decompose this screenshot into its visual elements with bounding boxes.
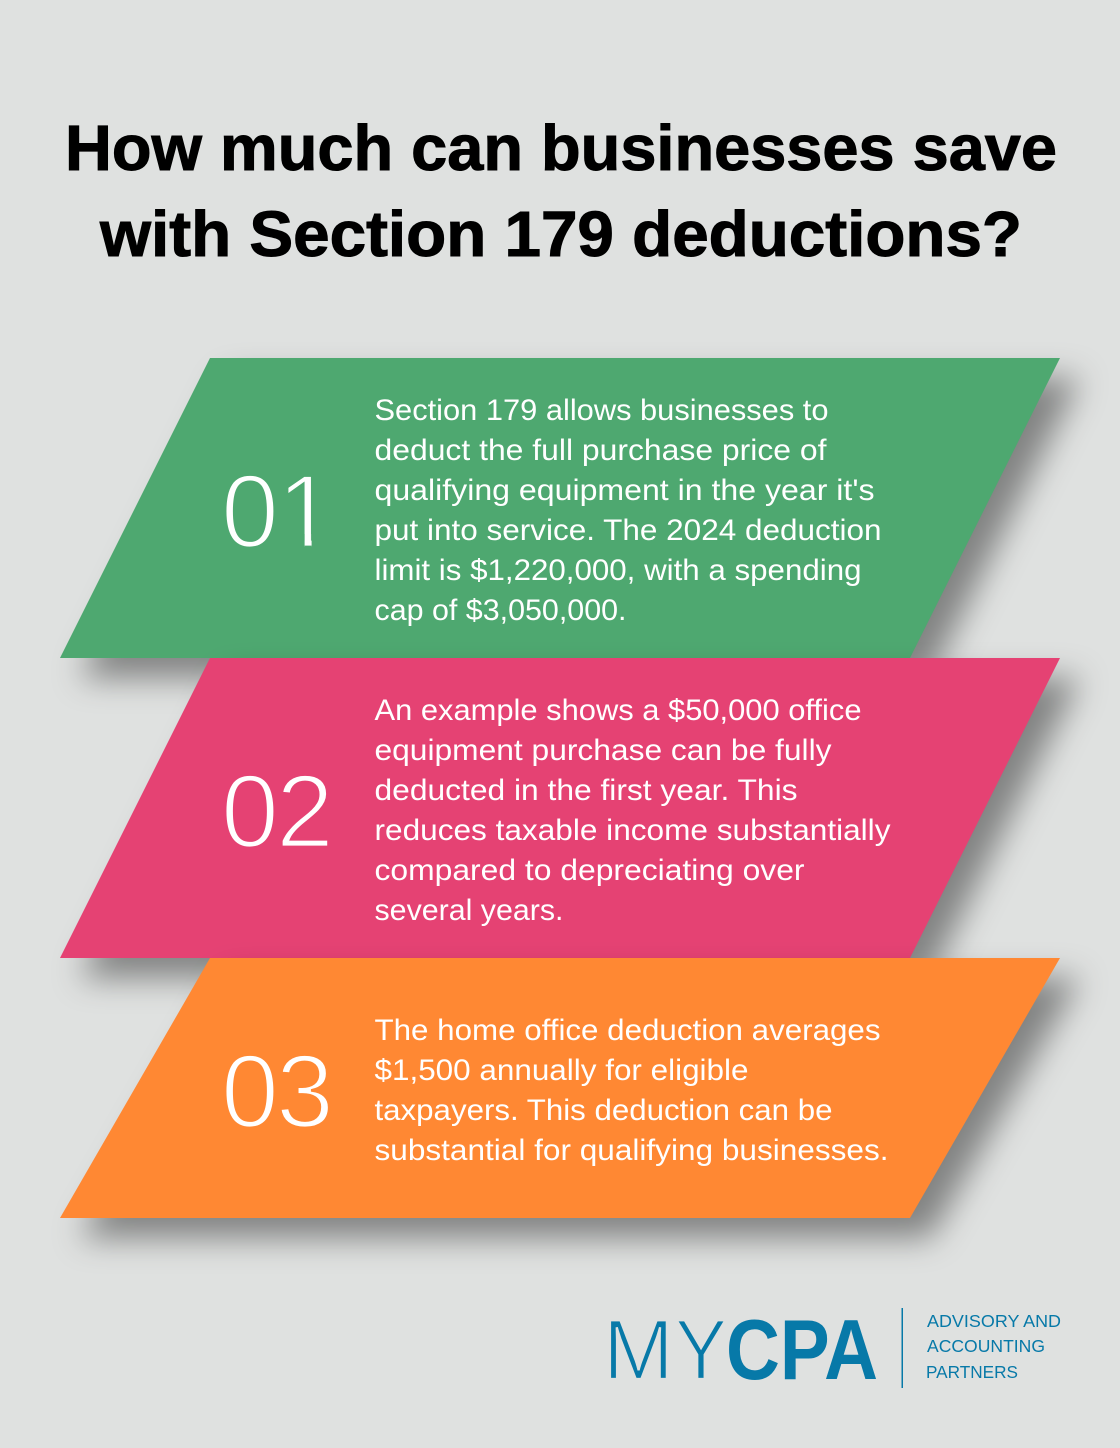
logo: MYCPA: ADVISORY AND [927,1311,1061,1331]
text: home office deduction: The home office deduction averages [374,1014,880,1047]
number 02: 2 [276,754,334,870]
text: home office deduction [374,1014,888,1167]
text: section 179 limit: deduct the full purchase price of [374,434,827,467]
logo: MYCPA: Y [675,1303,727,1398]
text: office equipment example: equipment purchase can be fully [374,734,832,767]
title: How much can businesses save [65,112,1057,184]
text: section 179 limit: limit is $1,220,000, with a spending [374,554,862,587]
text: section 179 limit [374,394,882,627]
number 01: 1 [277,454,335,570]
number 02: 0 [221,754,279,870]
pink parallelogram [60,658,1060,958]
number 03: 0 [221,1034,279,1150]
text: section 179 limit: qualifying equipment in the year it's [374,474,874,507]
orange parallelogram [60,958,1060,1218]
text: office equipment example: deducted in the first year. This [374,774,798,807]
text: section 179 limit: cap of $3,050,000. [374,594,626,627]
text: office equipment example: several years. [374,894,564,927]
title [65,112,1057,270]
logo: MYCPA [603,1303,1061,1398]
logo: MYCPA: CPA [726,1303,878,1398]
text: home office deduction: taxpayers. This deduction can be [374,1094,832,1127]
panel: step 01 [60,358,1060,658]
number 01 [226,476,312,547]
text: office equipment example: An example shows a $50,000 office [374,694,862,727]
logo: MYCPA: M [603,1303,674,1398]
number 02 [221,754,334,870]
logo: MYCPA: PARTNERS [926,1362,1018,1382]
text: office equipment example [374,694,890,927]
text: home office deduction: $1,500 annually for eligible [374,1054,748,1087]
logo: MYCPA: ACCOUNTING [927,1336,1045,1356]
number 03: 3 [276,1034,334,1150]
text: section 179 limit: Section 179 allows businesses to [374,394,828,427]
panel: step 03 [60,958,1060,1218]
title: with Section 179 deductions? [99,198,1022,270]
panel: step 02 [60,658,1060,958]
text: office equipment example: reduces taxable income substantially [374,814,890,847]
number 03 [221,1034,334,1150]
text: section 179 limit: put into service. The 2024 deduction [374,514,882,547]
number 01: 0 [221,454,279,570]
text: home office deduction: substantial for qualifying businesses. [374,1134,888,1167]
text: office equipment example: compared to depreciating over [374,854,805,887]
green parallelogram [60,358,1060,658]
